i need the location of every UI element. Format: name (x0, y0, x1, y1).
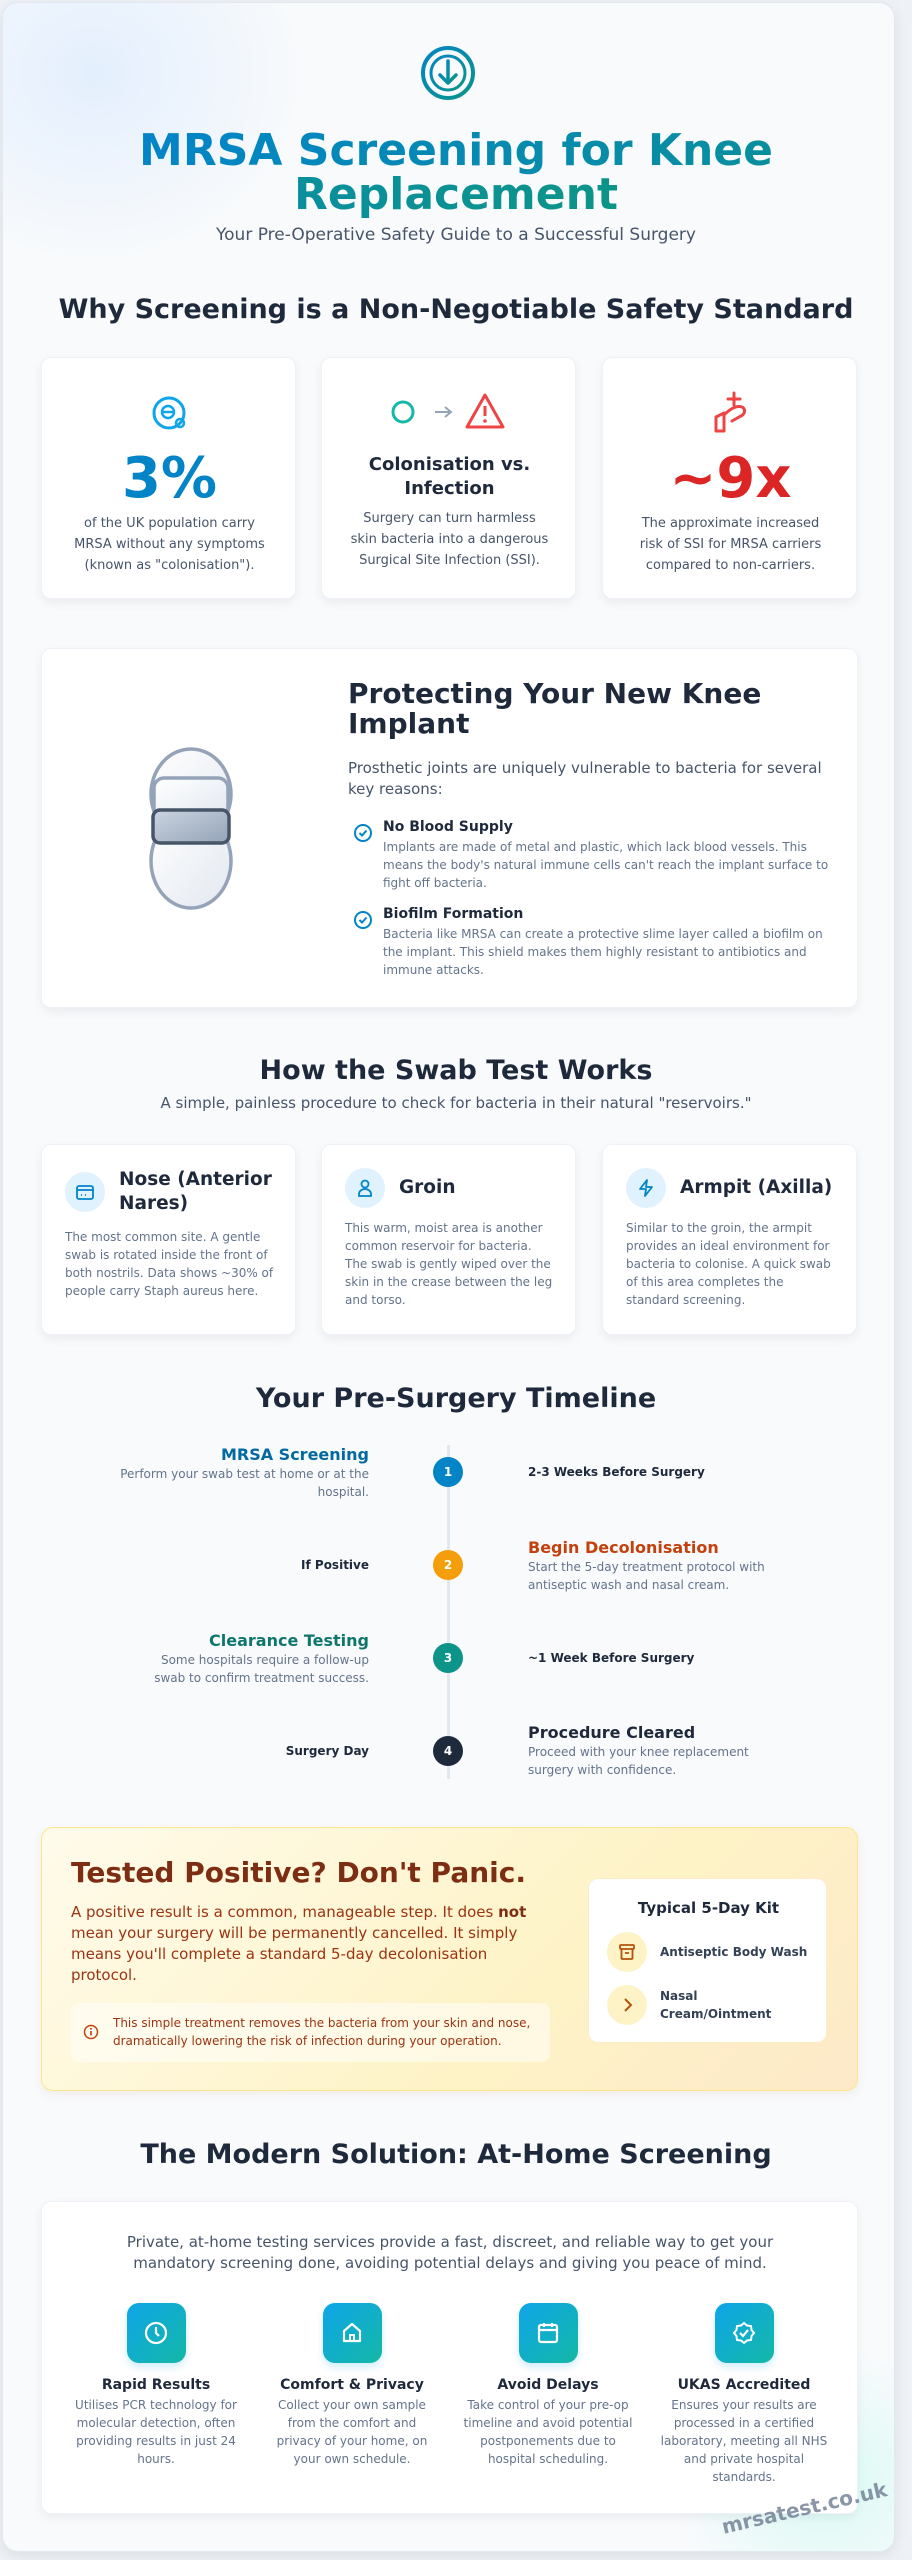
icon: person (345, 1168, 385, 1208)
kit item: body wash (607, 1932, 807, 1972)
step 1 left: Perform your swab test at home or at the hospital. (120, 1467, 369, 1499)
reason: no blood supply (354, 819, 828, 890)
card: colonisation vs infection (321, 357, 576, 599)
heading: modern solution: The Modern Solution: At-Home Screening (140, 2139, 772, 2170)
card: armpit (602, 1144, 857, 1335)
step 4 right: Procedure Cleared (528, 1723, 695, 1742)
icon: info (84, 2024, 98, 2040)
logo icon (421, 46, 475, 100)
icon: nose (65, 1172, 105, 1212)
kit card (588, 1878, 827, 2043)
benefit: comfort: Collect your own sample from the comfort and privacy of your home, on your own schedule. (277, 2398, 427, 2466)
title: Colonisation vs. (369, 454, 530, 475)
kit item: nasal cream: Nasal (660, 1989, 698, 2003)
card: 9x stat (602, 357, 857, 599)
benefit: rapid results (75, 2303, 237, 2466)
benefit: comfort: Comfort & Privacy (280, 2377, 424, 2393)
heading: Protecting Your New Knee Implant (348, 677, 761, 740)
heading: timeline: Your Pre-Surgery Timeline (256, 1383, 656, 1414)
info note (71, 2003, 550, 2062)
step 1 marker (433, 1457, 463, 1487)
benefit: UKAS (661, 2303, 827, 2484)
panel: protecting knee implant (41, 648, 858, 1008)
icon: bacteria arrow warning (392, 393, 504, 428)
benefit: comfort (277, 2303, 427, 2466)
benefit: UKAS: Ensures your results are processed in a certified laboratory, meeting all NHS and private hospital standards. (661, 2398, 827, 2484)
subheading: A simple, painless procedure to check for bacteria in their natural "reservoirs." (160, 1094, 752, 1112)
step 2 left: If Positive (301, 1558, 369, 1572)
step 1 right: 2-3 Weeks Before Surgery (528, 1465, 705, 1479)
icon: bolt (626, 1168, 666, 1208)
text: The approximate increased risk of SSI for MRSA carriers compared to non-carriers. (640, 516, 821, 573)
step 2 marker: 2 (444, 1558, 452, 1572)
watermark: mrsatest.co.uk (719, 2477, 889, 2539)
title (139, 125, 773, 220)
step 3 left: Clearance Testing (209, 1631, 369, 1650)
card: nose: Nose (Anterior Nares) (119, 1169, 272, 1214)
stat 3%: 3% (122, 446, 217, 511)
knee implant illustration (149, 747, 233, 910)
icon: check (354, 824, 372, 842)
step 4 marker: 4 (444, 1744, 452, 1758)
step 1 left (120, 1445, 369, 1499)
intro text: Private, at-home testing services provide a fast, discreet, and reliable way to get your mandatory screening done, avoiding potential delays and giving you peace of mind. (127, 2232, 773, 2272)
icon: check (354, 911, 372, 929)
step 4 right: Proceed with your knee replacement surgery with confidence. (528, 1745, 749, 1777)
step 3 left (154, 1631, 369, 1685)
step 2 right: Start the 5-day treatment protocol with antiseptic wash and nasal cream. (528, 1560, 765, 1592)
reason: biofilm: Bacteria like MRSA can create a protective slime layer called a biofilm on the implant. This shield makes them highly resistant to antibiotics and immune attacks. (383, 927, 823, 977)
reason: no blood supply: Implants are made of metal and plastic, which lack blood vessels. This means the body's natural immune cells can't reach the implant surface to fight off bacteria. (383, 840, 828, 890)
step 1 left: MRSA Screening (221, 1445, 369, 1464)
card: nose: The most common site. A gentle swab is rotated inside the front of both nostrils. Data shows ~30% of people carry Staph aureus here. (65, 1230, 273, 1298)
step 2 right: Begin Decolonisation (528, 1538, 719, 1557)
step 3 left: Some hospitals require a follow-up swab to confirm treatment success. (154, 1653, 369, 1685)
kit item: nasal cream (607, 1985, 772, 2025)
card: 3% stat (41, 357, 296, 599)
step 2 marker (433, 1550, 463, 1580)
card: nose (41, 1144, 296, 1335)
benefit: avoid delays (464, 2303, 632, 2466)
benefit: rapid results: Rapid Results (102, 2377, 210, 2393)
card: armpit: Similar to the groin, the armpit provides an ideal environment for bacteria to colonise. A quick swab of this area completes the standard screening. (626, 1221, 831, 1307)
step 4 marker (433, 1736, 463, 1766)
benefit: UKAS: UKAS Accredited (678, 2377, 810, 2393)
panel: at-home benefits (41, 2201, 858, 2514)
stat ~9x: ~9x (669, 446, 792, 511)
reason: biofilm (354, 906, 823, 977)
benefit: rapid results: Utilises PCR technology for molecular detection, often providing results in just 24 hours. (75, 2398, 237, 2466)
kit card: Typical 5-Day Kit (638, 1899, 779, 1917)
card: groin: Groin (399, 1177, 456, 1198)
step 4 left: Surgery Day (286, 1744, 369, 1758)
info note: This simple treatment removes the bacteria from your skin and nose, dramatically lowering the risk of infection during your operation. (113, 2016, 530, 2048)
title: Infection (404, 478, 495, 499)
heading: swab test: How the Swab Test Works (260, 1055, 652, 1086)
title: Replacement (294, 169, 618, 220)
intro text: Prosthetic joints are uniquely vulnerable to bacteria for several key reasons: (348, 758, 822, 798)
heading: why screening: Why Screening is a Non-Negotiable Safety Standard (59, 294, 853, 325)
card: groin (321, 1144, 576, 1335)
card: groin: This warm, moist area is another common reservoir for bacteria. The swab is gently wiped over the skin in the crease between the leg and torso. (345, 1221, 552, 1307)
text: Surgery can turn harmless skin bacteria into a dangerous Surgical Site Infection (SSI). (351, 510, 548, 568)
icon: bacteria (152, 396, 186, 430)
benefit: avoid delays: Take control of your pre-op timeline and avoid potential postponements due to hospital scheduling. (464, 2398, 632, 2466)
kit item: nasal cream: Cream/Ointment (660, 2007, 771, 2021)
icon: red hand/medical (714, 392, 746, 432)
reason: no blood supply: No Blood Supply (383, 819, 513, 835)
timeline (447, 1445, 450, 1779)
step 3 marker: 3 (444, 1651, 452, 1665)
panel: tested positive (41, 1827, 858, 2091)
step 4 right (528, 1723, 749, 1777)
subtitle: Your Pre-Operative Safety Guide to a Successful Surgery (216, 225, 696, 245)
kit item: body wash: Antiseptic Body Wash (660, 1945, 807, 1959)
step 3 right: ~1 Week Before Surgery (528, 1651, 694, 1665)
title: MRSA Screening for Knee (139, 125, 773, 176)
reason: biofilm: Biofilm Formation (383, 906, 523, 922)
step 3 marker (433, 1643, 463, 1673)
title (369, 454, 530, 499)
text: of the UK population carry MRSA without any symptoms (known as "colonisation"). (74, 516, 265, 573)
step 2 right (528, 1538, 765, 1592)
heading: Tested Positive? Don't Panic. (71, 1856, 526, 1889)
step 1 marker: 1 (444, 1465, 452, 1479)
card: armpit: Armpit (Axilla) (680, 1177, 832, 1198)
benefit: avoid delays: Avoid Delays (497, 2377, 599, 2393)
text: A positive result is a common, manageable step. It does not mean your surgery will be permanently cancelled. It simply means you'll complete a standard 5-day decolonisation protocol. (71, 1902, 526, 1984)
